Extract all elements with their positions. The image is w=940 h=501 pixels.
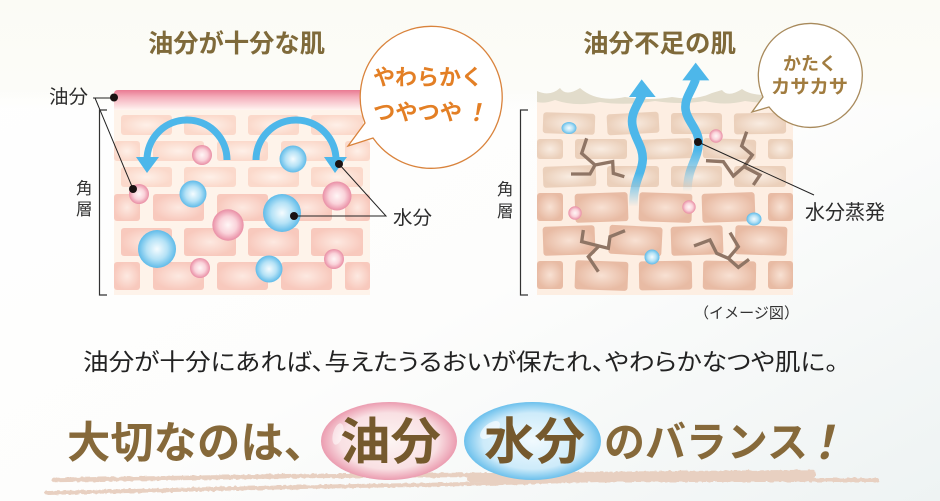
bracket: stratum corneum: 層 [497, 203, 514, 221]
bracket: stratum corneum [497, 110, 528, 295]
bracket: stratum corneum: 層 [76, 201, 92, 219]
water droplets [138, 146, 306, 282]
oil droplets [129, 145, 352, 278]
panel: skin with enough oil [49, 26, 502, 295]
label: water evaporation: 水分蒸発 [805, 201, 885, 224]
slogan closing text: ！ [799, 417, 856, 469]
callout: soft and glossy: ！ [463, 100, 492, 127]
bracket: stratum corneum: 角 [497, 180, 514, 199]
callout: soft and glossy: やわらかく [373, 65, 483, 90]
callout: hard and dry [752, 23, 862, 127]
bubble: water: 水分 [484, 414, 585, 470]
arrow: circulating left [136, 120, 227, 173]
arrow: evaporation left [629, 79, 656, 206]
slogan lead text: 大切なのは、 [67, 420, 327, 468]
callout: soft and glossy [348, 26, 502, 168]
skin layer with tilted bricks [537, 100, 793, 295]
oil layer bar [114, 90, 372, 110]
callout: soft and glossy: つやつや [373, 100, 462, 125]
arrow: circulating right [256, 120, 347, 173]
bracket: stratum corneum: 角 [76, 179, 92, 198]
text block: explanation: 油分が十分にあれば、与えたうるおいが保たれ、やわらかなつや肌に。 [83, 349, 838, 375]
label: oil [49, 86, 137, 193]
bubble: oil: 油分 [340, 414, 441, 470]
bracket: stratum corneum [76, 110, 107, 295]
heading: skin with enough oil: 油分が十分な肌 [148, 29, 325, 58]
small oil droplets [568, 129, 723, 220]
arrow: evaporation right [682, 63, 709, 192]
label: water [290, 160, 432, 229]
note: image diagram: （イメージ図） [694, 305, 799, 322]
callout: hard and dry: カサカサ [771, 77, 848, 98]
dry skin surface flakes [537, 88, 793, 104]
cracks [571, 132, 760, 272]
label: water evaporation [694, 138, 885, 224]
slogan closing text: のバランス [604, 419, 808, 466]
small water droplets [562, 122, 762, 264]
bubble: water [464, 402, 601, 480]
decorative brush underline [47, 472, 877, 493]
panel: skin lacking oil [497, 23, 885, 322]
heading: skin lacking oil: 油分不足の肌 [583, 30, 736, 58]
label: oil: 油分 [49, 86, 88, 108]
callout: hard and dry: かたく [783, 54, 837, 74]
label: water: 水分 [393, 207, 432, 229]
balance slogan [67, 402, 856, 480]
skin layer with bricks [114, 110, 370, 295]
bubble: oil [321, 402, 457, 480]
